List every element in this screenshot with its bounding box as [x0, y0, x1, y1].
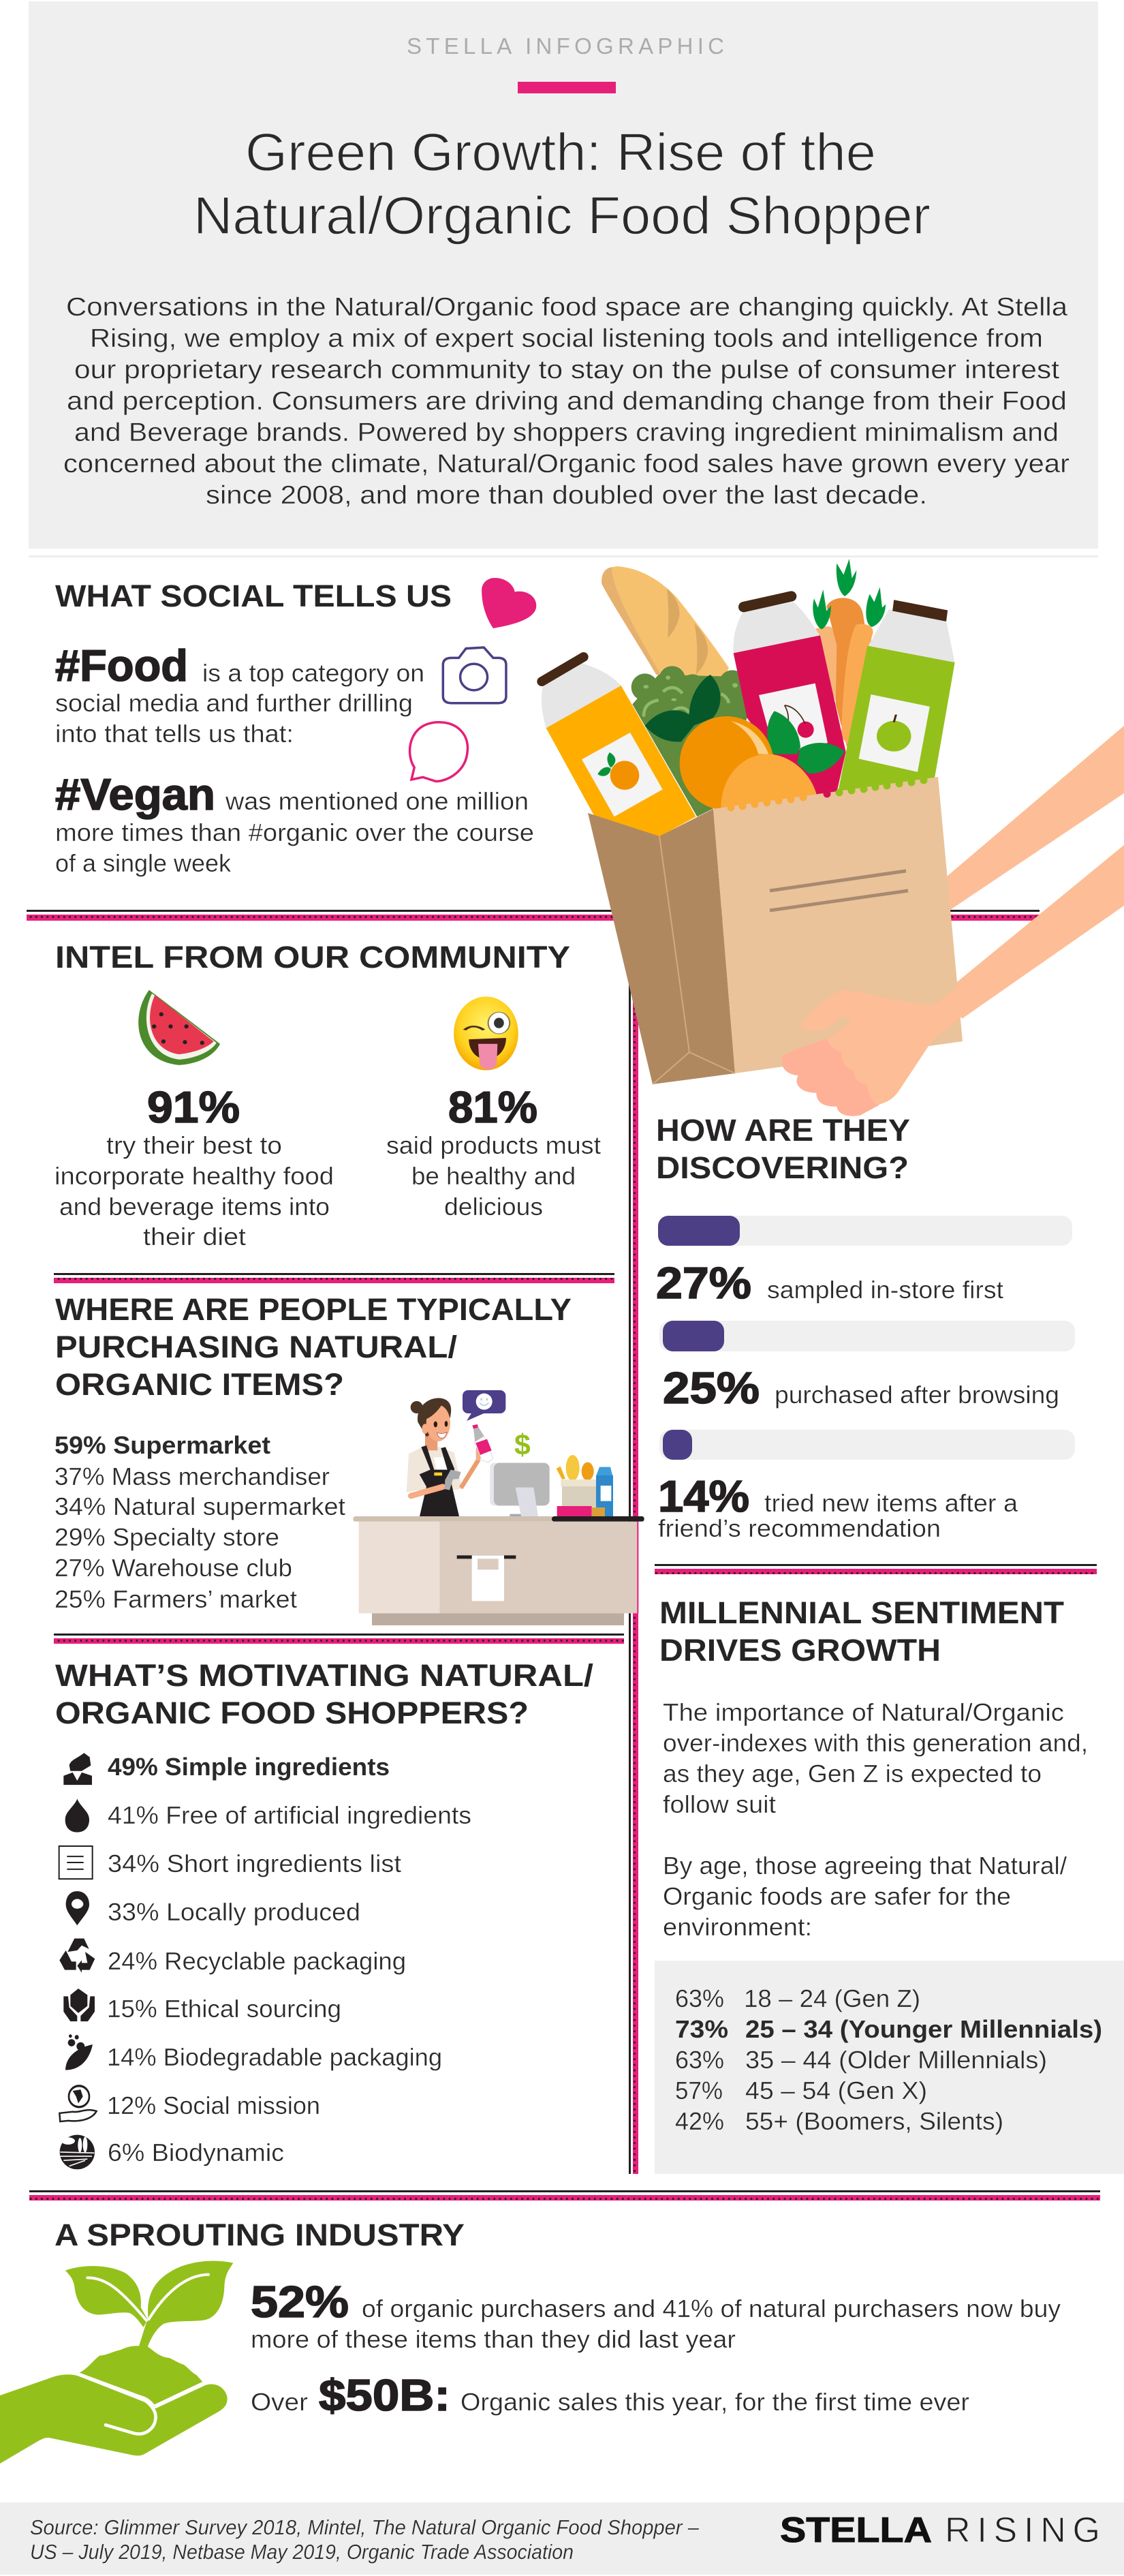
retail channel list: 25% Farmers’ market [54, 1585, 297, 1613]
paragraph: generation: over-indexes with this generation and, [663, 1729, 1088, 1757]
age table: 63% [675, 2046, 724, 2074]
pink bottle [733, 596, 846, 797]
intro paragraph: Rising, we employ a mix of expert social listening tools and intelligence from [90, 324, 1043, 353]
heading [55, 1658, 594, 1730]
stat: $50B: Over [251, 2388, 308, 2416]
bar: 27% [656, 1216, 1072, 1308]
panel: a sprouting industry [0, 2218, 1061, 2464]
icons: motivation list [59, 1753, 97, 2169]
stat: 81%: 81% [448, 1082, 537, 1132]
age table: 55+ (Boomers, Silents) [745, 2107, 1003, 2135]
age table: 35 – 44 (Older Millennials) [745, 2046, 1047, 2074]
bar: 25% [659, 1321, 1075, 1413]
source note: US – July 2019, Netbase May 2019, Organic Trade Association [30, 2540, 574, 2564]
heading: INTEL FROM OUR COMMUNITY [55, 940, 570, 975]
motivation list [107, 1753, 471, 2166]
icon: speech bubble [410, 722, 467, 782]
retail channel list: 59% Supermarket [54, 1431, 270, 1459]
intro paragraph: concerned about the climate, Natural/Organic food sales have grown every year [63, 450, 1070, 478]
accent bar [518, 82, 616, 93]
arms [947, 726, 1124, 1019]
source note: Source: Glimmer Survey 2018, Mintel, The Natural Organic Food Shopper – [30, 2515, 700, 2539]
oranges [680, 716, 818, 811]
motivation list: 24% Recyclable packaging [108, 1947, 406, 1975]
logo: Stella Rising: RISING [945, 2511, 1100, 2550]
motivation list: 33% Locally produced [108, 1898, 360, 1926]
bar: 27%: 27% [656, 1258, 751, 1308]
cash register monitor [490, 1463, 550, 1516]
stat: 81%: delicious [444, 1193, 543, 1221]
carrots [805, 559, 886, 748]
bar: 25%: purchased after browsing [775, 1381, 1059, 1409]
illustration: grocery bag held by hands [542, 559, 1124, 1116]
icon: social mission [59, 2086, 97, 2121]
label: Stella Infographic: STELLA INFOGRAPHIC [407, 33, 724, 59]
green leaves [767, 711, 845, 773]
age table: 57% [675, 2076, 723, 2104]
panel: how are they discovering [656, 1113, 1075, 1542]
icon: winking tongue emoji [454, 996, 518, 1071]
stat: 81%: said products must [386, 1131, 601, 1159]
icon: heart [482, 578, 536, 628]
paragraph: by age: By age, those agreeing that Natural/ [663, 1852, 1067, 1880]
retail channel list [54, 1431, 345, 1613]
heading: A SPROUTING INDUSTRY [54, 2218, 465, 2252]
heading: WHAT SOCIAL TELLS US [55, 579, 452, 613]
heading: MILLENNIAL SENTIMENT [659, 1595, 1064, 1630]
counter [353, 1516, 644, 1625]
stat: 91%: try their best to [106, 1131, 282, 1159]
retail channel list: 27% Warehouse club [54, 1554, 292, 1582]
stat: #Vegan [55, 769, 534, 877]
heading: WHAT’S MOTIVATING NATURAL/ [55, 1658, 594, 1693]
paragraph: by age: environment: [663, 1913, 812, 1941]
heading: WHERE ARE PEOPLE TYPICALLY [55, 1292, 572, 1327]
icon: recycle [59, 1938, 95, 1973]
stat: 52%: more of these items than they did last year [251, 2325, 736, 2353]
intro paragraph [63, 293, 1070, 510]
salad greens [631, 666, 747, 816]
paragraph: by age [663, 1852, 1067, 1941]
title: Green Growth: Rise of the [245, 122, 876, 182]
panel: intel from our community [54, 940, 601, 1251]
stat: #Vegan: was mentioned one million [225, 787, 529, 815]
stat: 81% [386, 1082, 601, 1221]
icon: simple ingredients [63, 1753, 92, 1785]
heading [55, 1292, 572, 1402]
orange bottle [542, 657, 696, 836]
panel: millennial sentiment [655, 1595, 1124, 2174]
stat: #Vegan: more times than #organic over the course [55, 818, 534, 846]
stat: #Food: into that tells us that: [55, 720, 294, 748]
bottle [472, 1424, 493, 1462]
stat: $50B: Organic sales this year, for the first time ever [460, 2388, 969, 2416]
paragraph: generation: follow suit [663, 1790, 776, 1818]
motivation list: 49% Simple ingredients [108, 1753, 390, 1781]
paragraph: by age: Organic foods are safer for the [663, 1882, 1011, 1910]
dollar sign: $ [514, 1428, 531, 1461]
stat: 91%: their diet [143, 1223, 246, 1251]
motivation list: 14% Biodegradable packaging [107, 2043, 442, 2071]
retail channel list: 29% Specialty store [54, 1523, 279, 1551]
title: Natural/Organic Food Shopper [193, 185, 931, 245]
stat: 91% [54, 1082, 334, 1251]
intro paragraph: and perception. Consumers are driving and demanding change from their Food [67, 387, 1067, 416]
hand [782, 985, 963, 1116]
age table: 18 – 24 (Gen Z) [744, 1984, 920, 2012]
age table: 25 – 34 (Younger Millennials) [745, 2015, 1102, 2043]
retail channel list: 34% Natural supermarket [54, 1492, 345, 1520]
bar: 14%: tried new items after a [764, 1489, 1018, 1517]
stat: #Food: is a top category on [202, 659, 424, 687]
age table [655, 1961, 1124, 2174]
paper bag [588, 777, 963, 1084]
icon: watermelon [138, 990, 220, 1065]
icon: location pin [66, 1891, 89, 1925]
panel: header [29, 1, 1098, 549]
age table: 42% [675, 2107, 724, 2135]
stat: #Food: #Food [55, 641, 188, 690]
heading: HOW ARE THEY [656, 1113, 910, 1148]
stat: #Food [55, 641, 424, 748]
cashier [407, 1398, 480, 1516]
paragraph: generation: as they age, Gen Z is expected to [663, 1760, 1042, 1788]
intro paragraph: and Beverage brands. Powered by shoppers craving ingredient minimalism and [74, 418, 1059, 447]
heading [656, 1113, 910, 1185]
icon: camera [443, 647, 506, 703]
panel: motivations [55, 1658, 594, 2169]
stat: $50B [251, 2370, 969, 2420]
stat: 52%: of organic purchasers and 41% of natural purchasers now buy [362, 2295, 1061, 2322]
stat: #Vegan: of a single week [55, 849, 232, 877]
heading [659, 1595, 1064, 1668]
bar: 27%: sampled in-store first [767, 1276, 1003, 1304]
baguette [602, 566, 729, 681]
stat: 91%: 91% [147, 1082, 240, 1132]
bag contents, front layer [542, 657, 845, 836]
scalloped bag edge [728, 777, 928, 811]
icon: list [59, 1846, 93, 1879]
heading: PURCHASING NATURAL/ [55, 1330, 458, 1364]
bar: 25%: 25% [663, 1363, 760, 1413]
age table: 45 – 54 (Gen X) [745, 2076, 927, 2104]
panel: footer [0, 2502, 1124, 2575]
motivation list: 6% Biodynamic [108, 2138, 284, 2166]
intro paragraph: Conversations in the Natural/Organic food space are changing quickly. At Stella [66, 293, 1068, 322]
logo: Stella Rising [780, 2511, 1100, 2550]
stat: 81%: be healthy and [411, 1162, 576, 1190]
stat: 91%: incorporate healthy food [54, 1162, 334, 1190]
motivation list: 15% Ethical sourcing [107, 1995, 341, 2023]
heading: ORGANIC ITEMS? [55, 1367, 344, 1402]
intro paragraph: our proprietary research community to stay on the pulse of consumer interest [74, 356, 1059, 384]
heading: ORGANIC FOOD SHOPPERS? [55, 1696, 529, 1730]
bar: 14%: 14% [658, 1471, 749, 1521]
logo: Stella Rising: STELLA [780, 2511, 932, 2550]
panel: where people purchase [54, 1292, 644, 1625]
icon: drop [65, 1799, 89, 1833]
smiley speech bubble [463, 1390, 505, 1421]
icon: sprout in hand [0, 2261, 233, 2464]
stat: $50B: $50B: [319, 2370, 450, 2420]
stat: 52%: 52% [251, 2277, 349, 2327]
stat: 52% [251, 2277, 1061, 2353]
bag contents, back layer [602, 559, 886, 816]
illustration: cashier at checkout counter [353, 1390, 644, 1625]
icon: ethical sourcing [63, 1989, 95, 2021]
heading: DISCOVERING? [656, 1150, 909, 1185]
motivation list: 41% Free of artificial ingredients [108, 1801, 471, 1829]
heading: DRIVES GROWTH [659, 1633, 941, 1668]
bar: 14%: friend’s recommendation [658, 1514, 941, 1542]
retail channel list: 37% Mass merchandiser [54, 1462, 330, 1490]
icon: biodynamic [60, 2135, 95, 2169]
age table: 73% [675, 2015, 728, 2043]
groceries [557, 1455, 613, 1516]
bar: 14% [658, 1430, 1075, 1542]
green bottle [837, 600, 955, 795]
stat: 91%: and beverage items into [59, 1193, 330, 1221]
icon: biodegradable leaf [65, 2044, 93, 2070]
paragraph: generation: The importance of Natural/Organic [663, 1698, 1064, 1726]
stat: #Vegan: #Vegan [55, 769, 215, 819]
stat: #Food: social media and further drilling [55, 689, 413, 717]
age table: 63% [675, 1984, 724, 2012]
motivation list: 34% Short ingredients list [108, 1850, 401, 1877]
panel: what social tells us [55, 578, 536, 877]
source note [30, 2515, 700, 2564]
paragraph: generation [663, 1698, 1088, 1818]
title [193, 122, 931, 245]
motivation list: 12% Social mission [107, 2091, 320, 2119]
intro paragraph: since 2008, and more than doubled over the last decade. [206, 481, 927, 510]
